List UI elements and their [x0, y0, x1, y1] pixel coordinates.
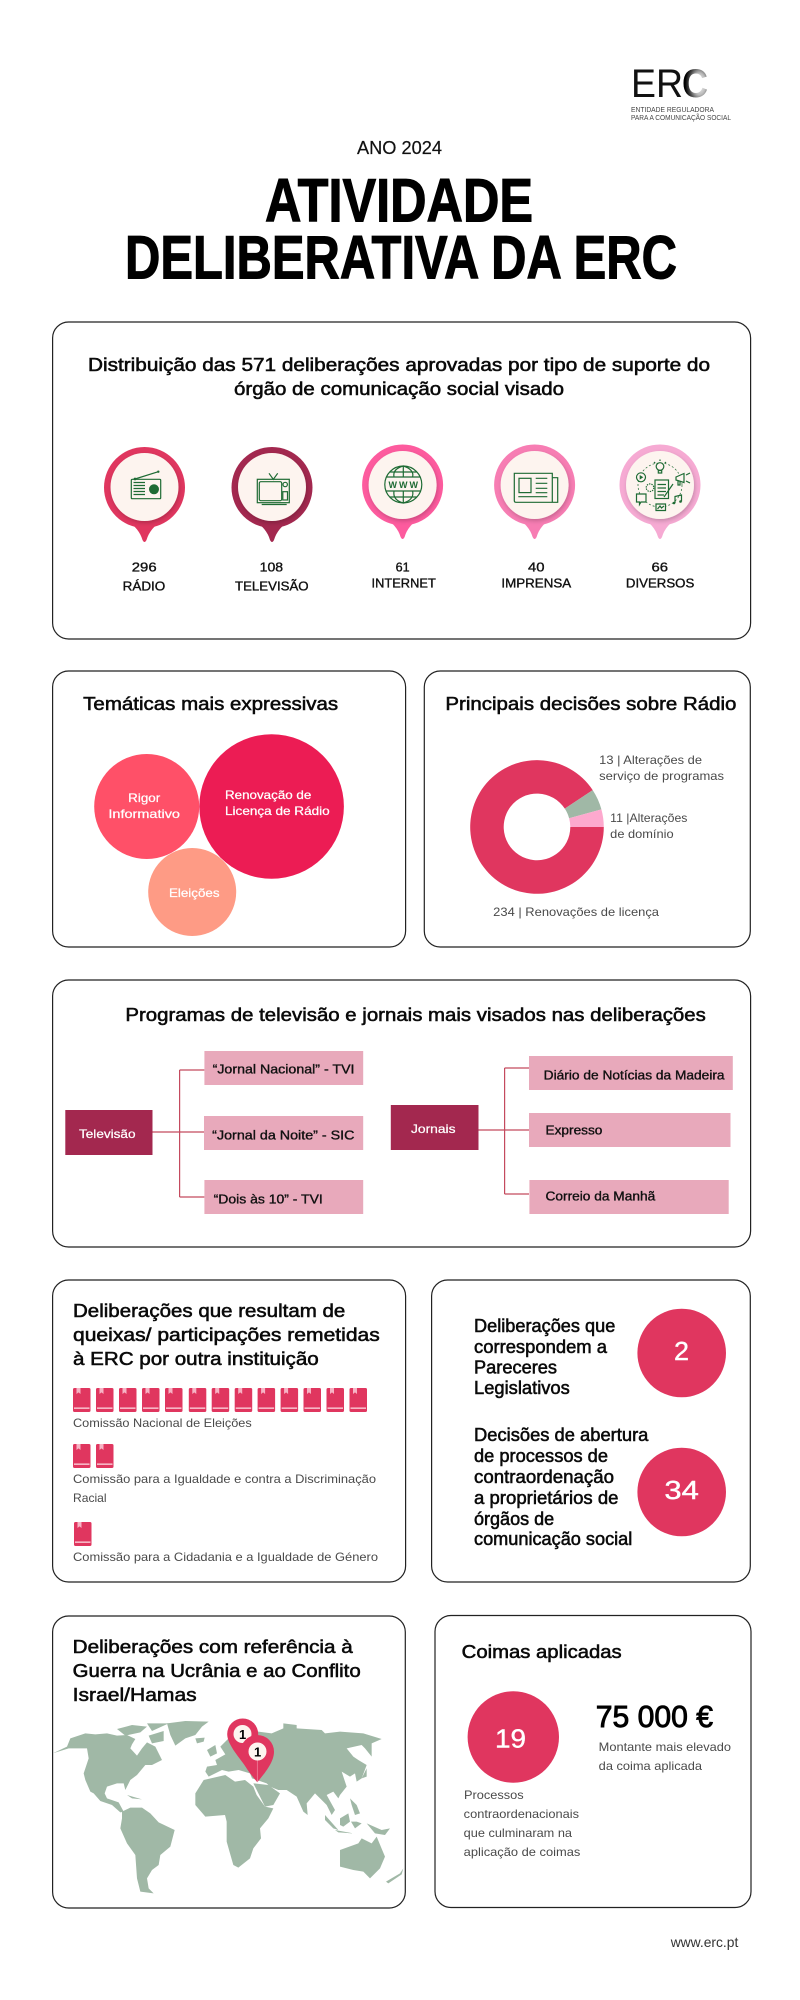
heading: war references: Israel/Hamas — [73, 1685, 197, 1705]
caption: highest fine: da coima aplicada — [599, 1759, 702, 1773]
bubble: Renovação de Licença de Rádio: Licença de Rádio — [225, 804, 330, 818]
bubble: Rigor Informativo: Informativo — [108, 807, 180, 821]
pin: internet — [362, 444, 443, 539]
logo: ERC: C — [682, 62, 708, 106]
heading: complaints: à ERC por outra instituição — [73, 1349, 319, 1369]
label: CICDR: Racial — [73, 1491, 107, 1505]
legend: licence renewals: 234 | Renovações de licença — [493, 905, 659, 919]
node: Televisão: Televisão — [79, 1127, 136, 1141]
panel: radio decisions — [424, 671, 750, 947]
bubble: Renovação de Licença de Rádio — [199, 734, 344, 879]
icon: media mix — [636, 460, 690, 510]
node: Correio da Manhã — [529, 1180, 729, 1214]
panel: legislative opinions and proceedings — [432, 1280, 750, 1582]
subtitle: year: ANO 2024 — [357, 138, 442, 158]
text: proceedings: órgãos de — [474, 1509, 554, 1529]
node: Jornal Nacional: “Jornal Nacional” - TVI — [213, 1062, 354, 1076]
node: Jornais — [391, 1105, 478, 1150]
heading: war references — [73, 1637, 361, 1705]
stat labels: media counts: 108 — [260, 560, 283, 574]
text: proceedings: comunicação social — [474, 1529, 632, 1549]
heading: war references: Deliberações com referência à — [73, 1637, 354, 1657]
panel: distribution of deliberations — [53, 322, 751, 639]
node: Jornal da Noite: “Jornal da Noite” - SIC — [212, 1128, 354, 1142]
stat: highest fine: 75 000 € — [596, 1699, 713, 1734]
node: Jornal da Noite — [204, 1116, 363, 1150]
stat labels: media counts — [123, 560, 694, 594]
legend: service changes: 13 | Alterações de — [599, 753, 702, 767]
stat labels: media counts: 40 — [528, 560, 545, 574]
stat circle: 34: 34 — [664, 1475, 699, 1505]
icon: globe: WWW — [388, 480, 418, 490]
logo: ERC: ER — [631, 62, 683, 106]
icon: 1 book — [74, 1522, 92, 1546]
heading: distribution — [88, 355, 710, 399]
bubble: Eleições — [148, 848, 236, 936]
text: proceedings: contraordenação — [474, 1467, 614, 1487]
label: CICDR: Comissão para a Igualdade e contra a Discriminação — [73, 1472, 376, 1486]
node: Dois às 10: “Dois às 10” - TVI — [214, 1192, 323, 1206]
heading: programmes: Programas de televisão e jornais mais visados nas deliberações — [125, 1005, 706, 1025]
text: legislative opinions — [474, 1316, 615, 1398]
label: CICDR — [73, 1472, 376, 1505]
stat labels: media counts: 66 — [652, 560, 668, 574]
node: Televisão — [65, 1110, 152, 1155]
heading: distribution: órgão de comunicação social visado — [234, 379, 564, 399]
legend: domain changes: 11 |Alterações — [610, 811, 687, 825]
stat labels: media counts: 296 — [132, 560, 157, 574]
text: legislative opinions: Legislativos — [474, 1378, 570, 1398]
logo: ERC: ENTIDADE REGULADORA — [631, 107, 714, 114]
tree: television — [65, 1051, 363, 1214]
node: Expresso: Expresso — [546, 1124, 602, 1138]
map pin: Ukraine — [227, 1718, 258, 1770]
legend: domain changes — [610, 811, 687, 841]
node: Expresso — [529, 1113, 730, 1147]
stat labels: media counts: INTERNET — [372, 576, 436, 590]
stat circle: 34 — [637, 1448, 726, 1536]
heading: themes: Temáticas mais expressivas — [83, 694, 338, 714]
icons: 2 books — [73, 1444, 114, 1468]
icon: newspaper — [514, 473, 558, 502]
text: proceedings: a proprietários de — [474, 1488, 618, 1508]
pin: radio — [104, 447, 185, 542]
text: proceedings: de processos de — [474, 1446, 608, 1466]
bubble: Rigor Informativo — [94, 754, 199, 859]
world map — [53, 1721, 403, 1893]
label: CNE: Comissão Nacional de Eleições — [73, 1416, 252, 1430]
heading: fines: Coimas aplicadas — [462, 1642, 622, 1662]
text: legislative opinions: Pareceres — [474, 1358, 557, 1378]
text: legislative opinions: Deliberações que — [474, 1316, 615, 1336]
caption: highest fine — [599, 1740, 731, 1773]
title — [125, 166, 677, 292]
legend: domain changes: de domínio — [610, 827, 674, 841]
text: proceedings — [474, 1425, 649, 1549]
stat labels: media counts: IMPRENSA — [501, 576, 572, 590]
logo: ERC — [631, 62, 731, 122]
text: legislative opinions: correspondem a — [474, 1337, 608, 1357]
logo: ERC: PARA A COMUNICAÇÃO SOCIAL — [631, 113, 731, 122]
panel: TV programmes and newspapers — [53, 980, 751, 1247]
icons: 13 books — [73, 1388, 367, 1412]
node: Correio da Manhã: Correio da Manhã — [546, 1190, 655, 1204]
stat circle: 19 — [468, 1691, 559, 1783]
bubble: Rigor Informativo: Rigor — [128, 791, 160, 805]
stat circle: 2 — [637, 1309, 726, 1397]
legend: service changes: serviço de programas — [599, 769, 724, 783]
stat labels: media counts: RÁDIO — [123, 578, 166, 594]
heading: distribution: Distribuição das 571 deliberações aprovadas por tipo de suporte do — [88, 355, 710, 375]
panel: complaints from other institutions — [53, 1280, 406, 1582]
caption: proceedings: que culminaram na — [464, 1826, 572, 1840]
stat labels: media counts: DIVERSOS — [626, 576, 694, 590]
heading: complaints: Deliberações que resultam de — [73, 1301, 345, 1321]
stat circle: 2: 2 — [674, 1336, 689, 1366]
icon: radio — [131, 470, 161, 499]
heading: complaints: queixas/ participações remetidas — [73, 1325, 380, 1345]
heading: radio decisions: Principais decisões sobre Rádio — [445, 694, 736, 714]
bubble: Renovação de Licença de Rádio: Renovação de — [225, 788, 312, 802]
stat labels: media counts: TELEVISÃO — [235, 580, 309, 594]
caption: proceedings: Processos — [464, 1788, 524, 1802]
stat labels: media counts: 61 — [396, 560, 410, 574]
bubble: Eleições: Eleições — [169, 886, 220, 900]
map pin: Israel/Hamas — [241, 1735, 274, 1782]
caption: highest fine: Montante mais elevado — [599, 1740, 731, 1754]
icon: television — [257, 473, 289, 504]
tree: newspapers — [391, 1056, 733, 1214]
caption: proceedings: contraordenacionais — [464, 1807, 579, 1821]
node: Dois às 10 — [204, 1180, 363, 1214]
node: Diário de Notícias da Madeira — [529, 1056, 733, 1090]
pin: various — [620, 444, 700, 539]
panel: war references — [53, 1616, 405, 1908]
legend: service changes — [599, 753, 724, 783]
caption: proceedings — [464, 1788, 580, 1859]
node: Diário de Notícias da Madeira: Diário de Notícias da Madeira — [544, 1068, 725, 1082]
pin: press — [494, 444, 575, 539]
caption: proceedings: aplicação de coimas — [464, 1845, 580, 1859]
map pin: Israel/Hamas: 1 — [254, 1744, 261, 1760]
text: proceedings: Decisões de abertura — [474, 1425, 649, 1445]
heading: complaints — [73, 1301, 380, 1369]
heading: war references: Guerra na Ucrânia e ao Conflito — [73, 1661, 361, 1681]
pin: television — [232, 447, 312, 542]
node: Jornais: Jornais — [411, 1122, 456, 1136]
label: CIG: Comissão para a Cidadania e a Igualdade de Género — [73, 1550, 378, 1564]
panel: themes — [53, 671, 406, 947]
stat circle: 19: 19 — [495, 1724, 526, 1754]
footer: website: www.erc.pt — [670, 1934, 738, 1950]
title: ATIVIDADE — [265, 166, 533, 234]
map pin: Ukraine: 1 — [239, 1727, 246, 1742]
donut chart — [470, 760, 604, 894]
title: DELIBERATIVA DA ERC — [125, 224, 677, 292]
node: Jornal Nacional — [204, 1051, 363, 1085]
panel: fines — [435, 1616, 751, 1908]
